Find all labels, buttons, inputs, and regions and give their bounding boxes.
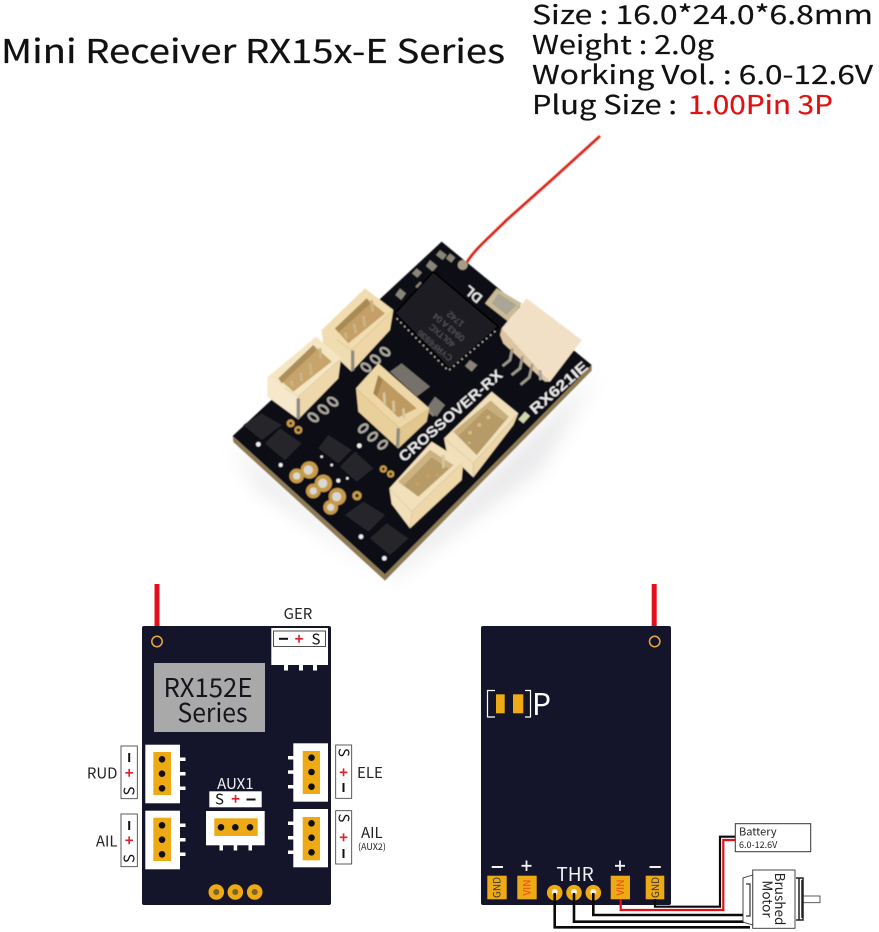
processor chip: 40LTXC [427,322,457,349]
product photo: receiver board [232,136,600,581]
small capacitor [427,397,445,417]
battery wires [621,837,736,910]
THR label: THR [556,860,594,887]
brushed motor [743,870,820,928]
connector: AIL left [96,811,186,869]
connector: RUD: S [118,786,140,795]
power pads: GND [647,877,662,898]
connector: AIL right (AUX2): AIL [361,822,383,843]
connector: RUD: RUD [87,762,118,784]
THR pads [547,885,601,900]
connector: AUX1: AUX1 [217,773,254,794]
battery label: 6.0-12.6V [739,838,778,851]
connector: centre [356,363,429,450]
connector: GER [271,603,328,670]
connector: GER: + [295,628,304,650]
series label [154,663,265,732]
connector: bottom [389,442,463,528]
connector: AIL right (AUX2): + [339,827,348,848]
silkscreen text [396,282,592,466]
white connector at right [500,298,582,385]
bind pad [488,680,551,724]
board [142,626,331,905]
connector: AIL right (AUX2): (AUX2) [358,840,386,853]
small components [395,250,477,417]
processor chip: 1742 [445,309,466,329]
diagram: RX152E board front [87,584,386,905]
connector: AUX1 [206,773,265,850]
antenna wire [466,136,600,264]
white vias [256,442,387,561]
specifications text block [532,0,873,122]
antenna pad [650,636,660,647]
connector: GER: S [312,628,321,650]
specifications text block: Weight : 2.0g [532,25,714,62]
connector: ELE: S [334,748,354,757]
silkscreen text: RX621IE [527,359,592,418]
processor chip [395,272,498,371]
specifications text block: Plug Size : [532,85,677,122]
power pads: VIN [612,880,627,895]
connector: AIL left: + [125,830,134,851]
series label: Series [178,693,248,730]
connector: AIL left: S [118,854,140,863]
connector: ELE: + [339,762,348,783]
connector: ELE: ELE [357,762,383,783]
connector: left [267,337,341,423]
power pads: VIN [518,880,534,895]
connector: AIL right (AUX2): S [334,814,354,823]
connector: AUX1: + [231,788,240,810]
solder pads [287,419,394,515]
title: Mini Receiver RX15x-E Series [1,25,505,73]
connector: upper left [322,288,393,373]
series label: RX152E [164,668,252,705]
antenna wire [154,584,160,640]
LED [518,412,530,423]
soft shadow [232,375,596,578]
board [481,626,671,905]
connector: lower right [444,392,518,477]
connector: RUD: + [125,762,134,784]
silkscreen text: DL [460,282,485,307]
brushed motor: Brushed [771,873,791,925]
silver shield [390,363,430,397]
circuit board [233,242,592,574]
motor wires [555,893,750,927]
specifications text block: Working Vol. : 6.0-12.6V [532,55,873,92]
brushed motor: Motor [758,880,778,918]
connector: AIL left: AIL [96,830,118,852]
antenna pad [152,636,162,647]
bind pad: P [532,680,551,724]
board edge [233,365,592,581]
connector: RUD [87,745,186,803]
connector: GER: GER [284,603,313,624]
antenna solder joint [458,260,468,270]
power pads: GND [488,877,504,898]
connector: AUX1: S [215,788,224,810]
diagram: board back with wiring [481,584,820,928]
power pads [487,860,664,899]
battery label [735,824,811,852]
crystal [485,288,522,322]
processor chip: CYRF6936 [415,328,454,363]
connector: ELE [288,743,383,802]
transistors [243,413,408,555]
solder pads [208,884,262,900]
processor chip: 0943 A 04 [431,311,467,344]
battery label: Battery [739,824,777,840]
connector: AIL right (AUX2) [288,809,386,867]
antenna wire [652,584,657,627]
specifications text block: 1.00Pin 3P [688,85,833,122]
silkscreen text: CROSSOVER-RX [396,367,506,466]
